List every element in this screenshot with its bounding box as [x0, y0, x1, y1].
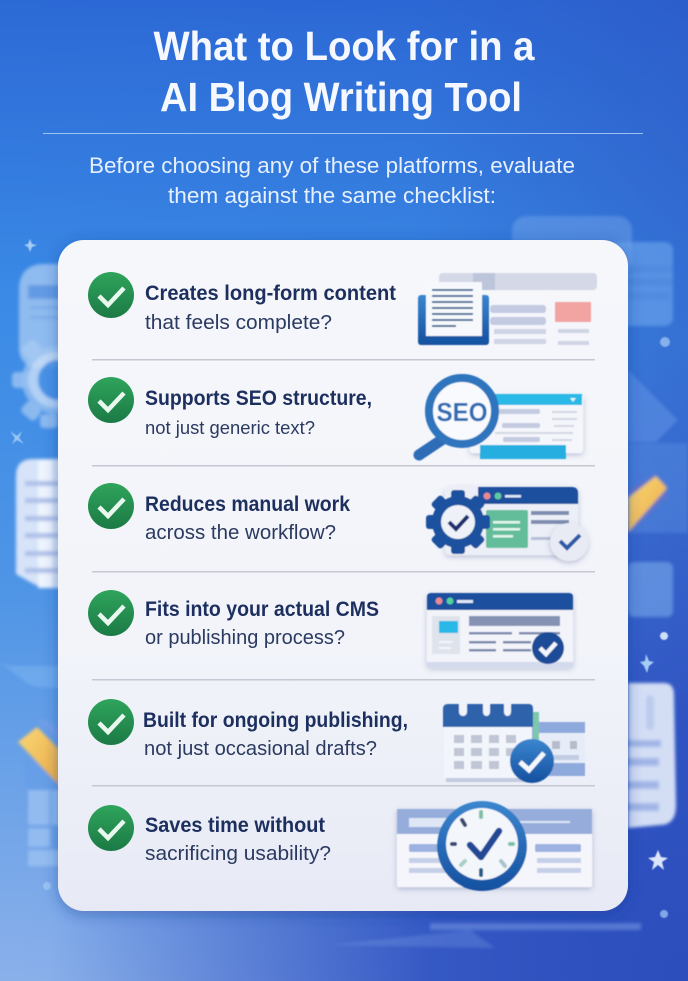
text: Fits into your actual CMS [145, 598, 379, 621]
item 5: ongoing publishing [88, 699, 585, 783]
decoration: left document [19, 264, 65, 368]
text: Built for ongoing publishing, [143, 709, 408, 732]
title: What to Look for in a [154, 23, 536, 69]
panel: checklist card [58, 240, 628, 911]
text: Creates long-form content [145, 282, 396, 305]
subtitle [89, 153, 575, 208]
decoration: right documents [512, 216, 688, 617]
item 6: saves time [88, 801, 592, 891]
item 2: SEO structure [88, 377, 583, 459]
subtitle: Before choosing any of these platforms, evaluate [89, 153, 575, 178]
text: not just generic text? [145, 417, 315, 438]
text: across the workflow? [145, 522, 336, 544]
text: Saves time without [145, 814, 325, 837]
check icon [88, 272, 134, 318]
background decorations [0, 216, 688, 948]
icon: SEO magnifier [419, 378, 583, 459]
icon: SEO magnifier: SEO [436, 397, 488, 427]
text [145, 493, 350, 544]
item 4: CMS fit [88, 590, 573, 668]
text [143, 709, 408, 760]
text [145, 814, 331, 865]
icon: gear and window [426, 487, 588, 561]
text: Reduces manual work [145, 493, 350, 516]
decoration: left checklist sheet [16, 459, 63, 588]
check icon [88, 483, 134, 529]
check icon [88, 590, 134, 636]
text [145, 387, 372, 438]
icon: calendar [443, 699, 585, 783]
decoration: bottom streak [430, 923, 641, 930]
text: sacrificing usability? [145, 843, 331, 865]
item 1: long-form content [88, 272, 597, 345]
title: AI Blog Writing Tool [160, 74, 522, 120]
decoration: left gear [12, 338, 90, 428]
decoration: sparkles [10, 239, 670, 918]
decoration: left pencil and grid [0, 662, 60, 866]
text [145, 598, 379, 649]
check icon [88, 377, 134, 423]
check icon [88, 699, 134, 745]
icon: document and page [418, 273, 597, 345]
text: Supports SEO structure, [145, 387, 372, 410]
check icon [88, 805, 134, 851]
text [145, 282, 396, 334]
item 3: reduces manual work [88, 483, 588, 561]
decoration: right lower sheet [628, 683, 676, 828]
text: that feels complete? [145, 312, 332, 334]
title [154, 23, 536, 120]
subtitle: them against the same checklist: [168, 183, 496, 208]
icon: clock and window [397, 801, 592, 891]
icon: CMS window [427, 593, 573, 668]
text: not just occasional drafts? [144, 738, 377, 760]
text: or publishing process? [145, 627, 345, 649]
